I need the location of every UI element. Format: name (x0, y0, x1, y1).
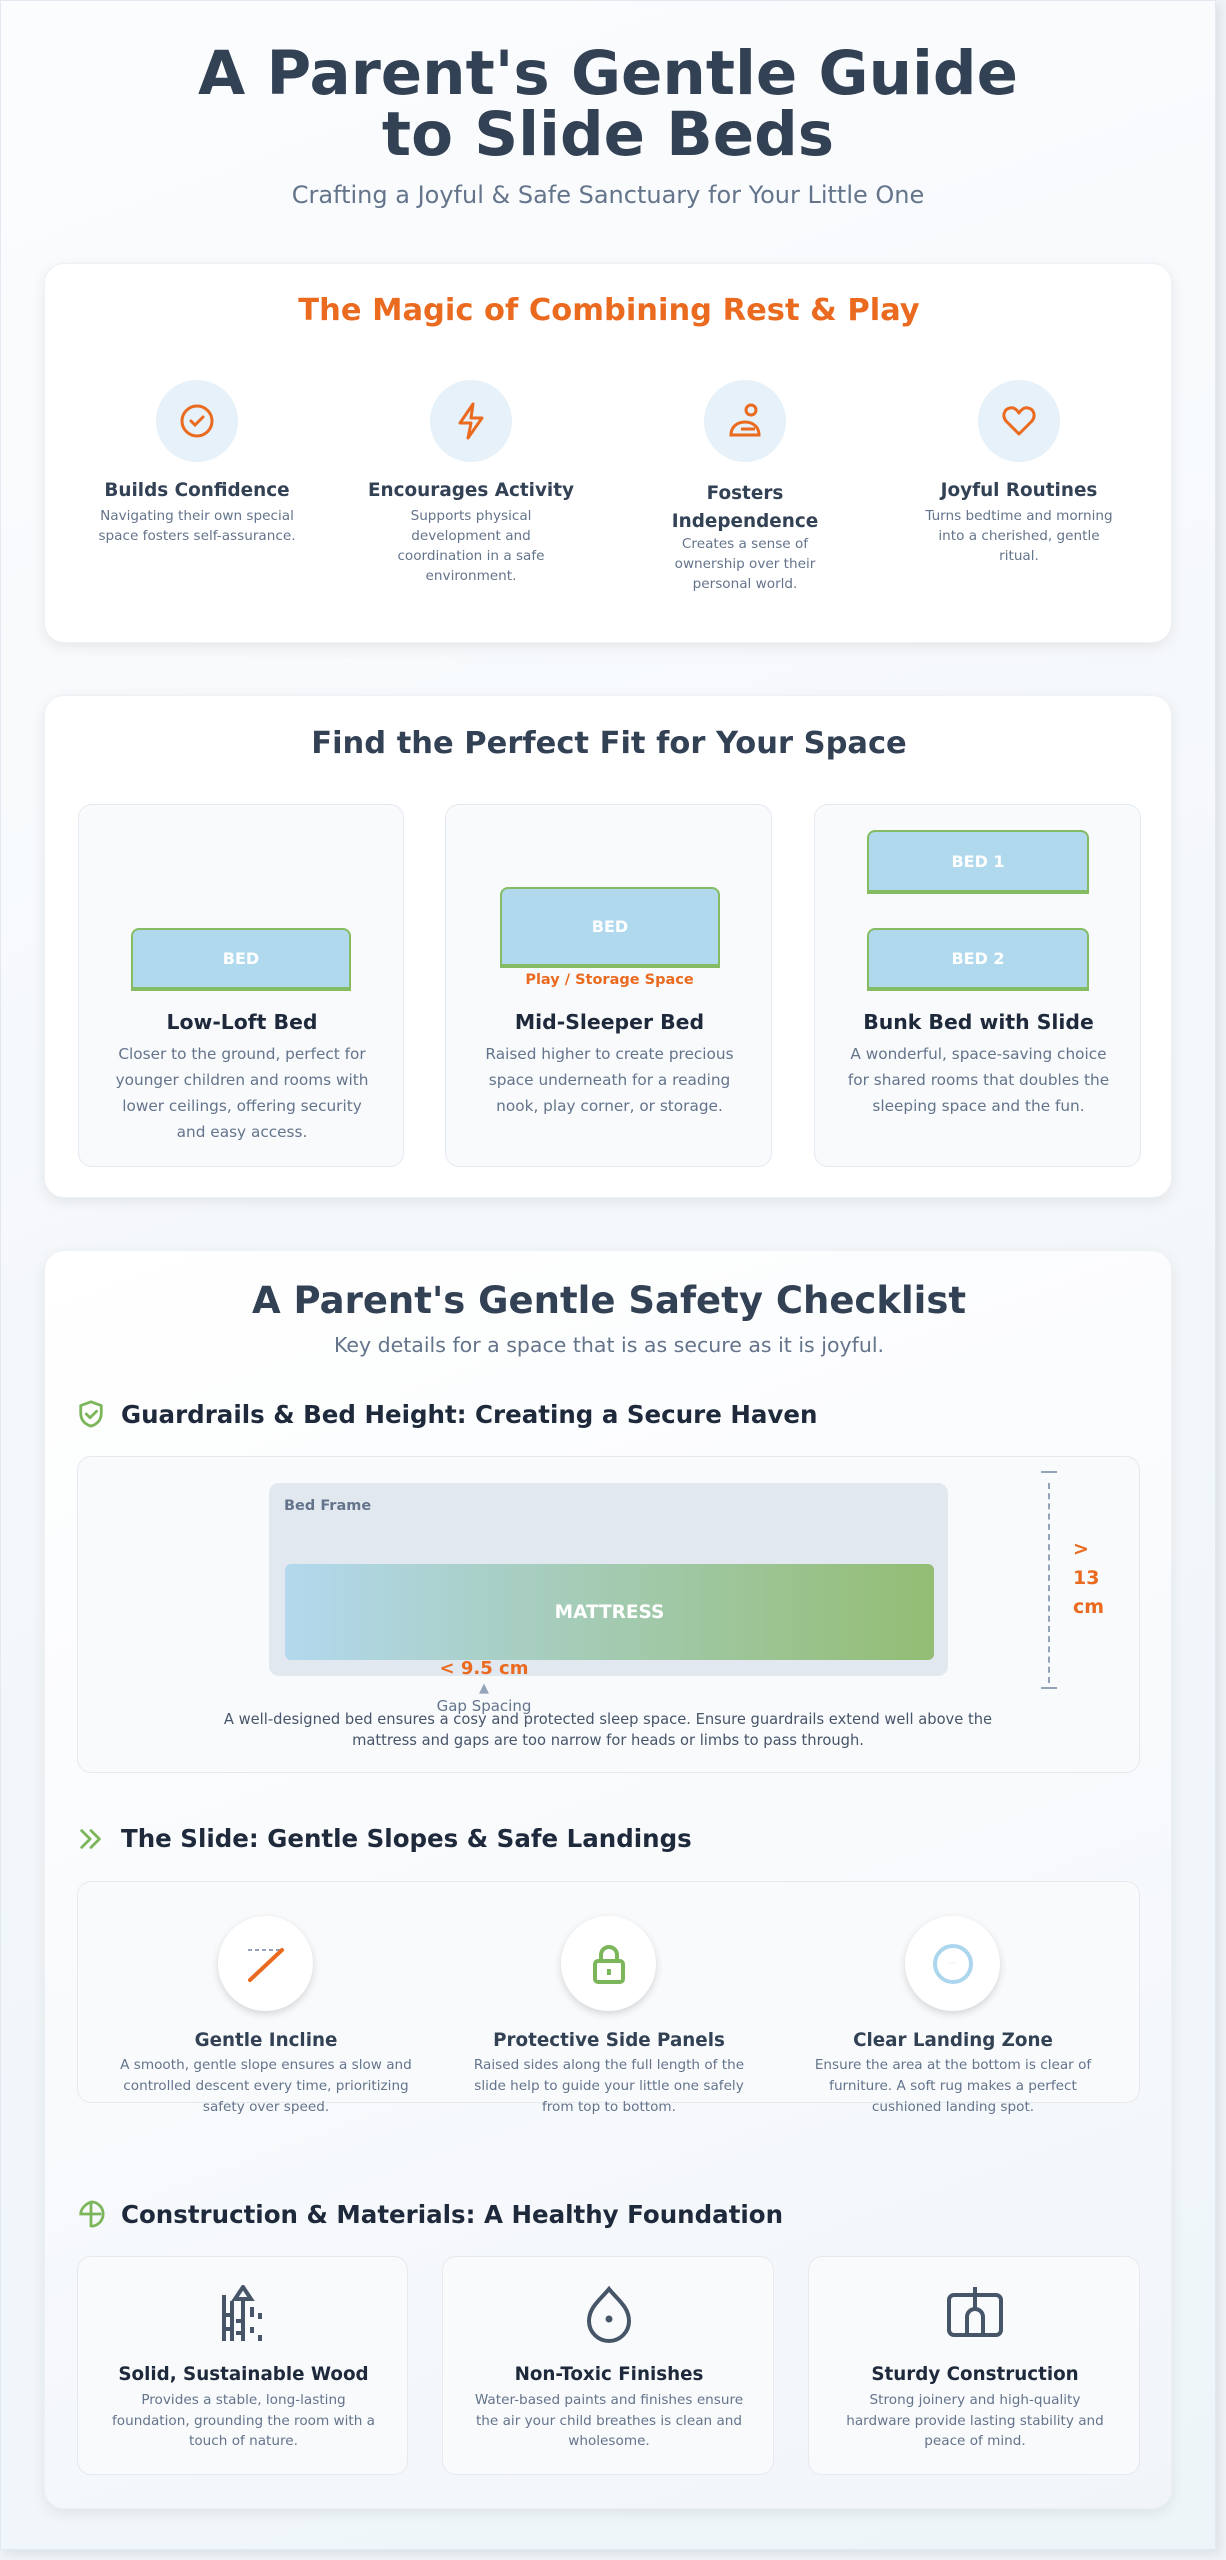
title: to Slide Beds (382, 99, 834, 170)
card: bunk: BED 2 (951, 949, 1005, 968)
diagram: guardrail: ▲ (479, 1681, 489, 1696)
card: wood: Solid, Sustainable Wood (118, 2364, 369, 2385)
label: height: cm (1073, 1596, 1104, 1618)
item: landing zone (815, 1928, 1092, 2115)
card: bunk (814, 804, 1141, 1167)
panel: slide features: Protective Side Panels (493, 2030, 725, 2051)
item: fosters independence (672, 380, 818, 592)
icon: structure (947, 2287, 1003, 2337)
item: encourages activity (368, 380, 574, 584)
bed diagram: BED (223, 949, 259, 968)
subtitle: Crafting a Joyful & Safe Sanctuary for Your Little One (292, 181, 924, 209)
bed diagram: bunk (867, 830, 1089, 894)
panel: slide features: Raised sides along the full length of the slide help to guide your little one safely from top to bottom. (474, 2057, 744, 2115)
icon: person (704, 380, 786, 462)
description: A well-designed bed ensures a cosy and protected sleep space. Ensure guardrails extend well above the mattress and gaps are too narrow for heads or limbs to pass through. (224, 1711, 992, 1749)
panel: magic of combining: Joyful Routines (941, 480, 1097, 501)
item: builds confidence (98, 380, 296, 544)
heading: checklist: A Parent's Gentle Safety Checklist (252, 1279, 966, 1322)
card: low-loft: Low-Loft Bed (166, 1010, 318, 1034)
card: finishes: Non-Toxic Finishes (515, 2364, 703, 2385)
label: height: > (1073, 1538, 1089, 1560)
card: mid-sleeper: Raised higher to create precious space underneath for a reading nook, play corner, or storage. (485, 1045, 734, 1115)
bed diagram: bunk: BED 1 (951, 852, 1005, 870)
card: bunk: Bunk Bed with Slide (863, 1010, 1094, 1034)
panel: magic of combining: Navigating their own special space fosters self-assurance. (98, 508, 296, 544)
panel: magic of combining: Supports physical development and coordination in a safe environment. (397, 508, 545, 584)
panel: slide features: Gentle Incline (195, 2030, 337, 2051)
panel: slide features: Ensure the area at the bottom is clear of furniture. A soft rug makes a perfect cushioned landing spot. (815, 2057, 1091, 2115)
heading: magic: The Magic of Combining Rest & Play (298, 293, 920, 328)
diagram: guardrail: Gap Spacing (437, 1697, 531, 1715)
title: A Parent's Gentle Guide (198, 38, 1018, 109)
icon: trees (222, 2285, 262, 2341)
card: finishes (442, 2256, 774, 2475)
icon: check circle (156, 380, 238, 462)
card: sturdy: Strong joinery and high-quality hardware provide lasting stability and peace of mind. (846, 2392, 1104, 2449)
icon: chevrons (80, 1829, 101, 1849)
label: height (1073, 1538, 1104, 1618)
panel: slide features: A smooth, gentle slope ensures a slow and controlled descent every time, prioritizing safety over speed. (120, 2057, 412, 2115)
card: sturdy: Sturdy Construction (871, 2364, 1079, 2385)
item: joyful routines (925, 380, 1113, 564)
panel: slide features (77, 1881, 1140, 2103)
mattress: MATTRESS (555, 1602, 664, 1622)
section heading: slide: The Slide: Gentle Slopes & Safe Landings (121, 1824, 692, 1853)
bed frame: Bed Frame (284, 1498, 371, 1514)
mattress (285, 1564, 934, 1660)
label: play storage: Play / Storage Space (525, 972, 694, 988)
icon: incline (218, 1916, 313, 2011)
card: low-loft: Closer to the ground, perfect for younger children and rooms with lower ceilings, offering security and easy access. (116, 1045, 368, 1141)
card: wood (77, 2256, 408, 2475)
card: bunk: A wonderful, space-saving choice for shared rooms that doubles the sleeping space and the fun. (848, 1045, 1109, 1115)
icon: leaf circle (79, 2200, 104, 2228)
card: mid-sleeper (445, 804, 772, 1167)
panel: magic of combining: Builds Confidence (104, 480, 290, 501)
card: finishes: Water-based paints and finishes ensure the air your child breathes is clean and wholesome. (475, 2392, 743, 2449)
bed diagram (500, 887, 720, 968)
label: gap: < 9.5 cm (440, 1658, 528, 1679)
card: mid-sleeper: Mid-Sleeper Bed (515, 1010, 704, 1034)
bed frame (269, 1483, 948, 1676)
bed diagram: BED (592, 917, 628, 936)
panel: magic of combining: Creates a sense of ownership over their personal world. (675, 536, 815, 592)
panel: magic of combining: Fosters Independence (672, 483, 818, 532)
panel: slide features: Clear Landing Zone (853, 2030, 1053, 2051)
icon: drop (587, 2286, 631, 2343)
card: low-loft (78, 804, 404, 1167)
diagram: guardrail (77, 1456, 1140, 1773)
panel: magic of combining: Encourages Activity (368, 480, 574, 501)
section heading: guardrails: Guardrails & Bed Height: Creating a Secure Haven (121, 1400, 817, 1428)
item: side panels (474, 1926, 744, 2115)
title (198, 38, 1018, 170)
icon: shield (79, 1400, 103, 1428)
section heading: construction: Construction & Materials: A Healthy Foundation (121, 2200, 783, 2228)
icon: bolt (430, 380, 512, 462)
heading: perfect fit: Find the Perfect Fit for Your Space (311, 726, 907, 761)
panel: magic of combining (44, 263, 1172, 643)
panel: magic of combining: Turns bedtime and morning into a cherished, gentle ritual. (925, 508, 1113, 564)
icon: circle (905, 1916, 1000, 2011)
icon: circle: ··· (949, 1958, 956, 1968)
dimension line (1041, 1471, 1057, 1473)
panel: perfect fit (44, 695, 1172, 1198)
card: sturdy (808, 2256, 1140, 2475)
card: wood: Provides a stable, long-lasting foundation, grounding the room with a touch of nature. (112, 2392, 375, 2449)
icon: lock (561, 1916, 656, 2011)
label: height: 13 (1073, 1567, 1099, 1589)
bed diagram (131, 928, 351, 991)
panel: safety checklist: Key details for a space that is as secure as it is joyful. (334, 1333, 884, 1357)
icon: heart (978, 380, 1060, 462)
item: gentle incline (120, 1928, 412, 2115)
panel: safety checklist (44, 1250, 1172, 2509)
